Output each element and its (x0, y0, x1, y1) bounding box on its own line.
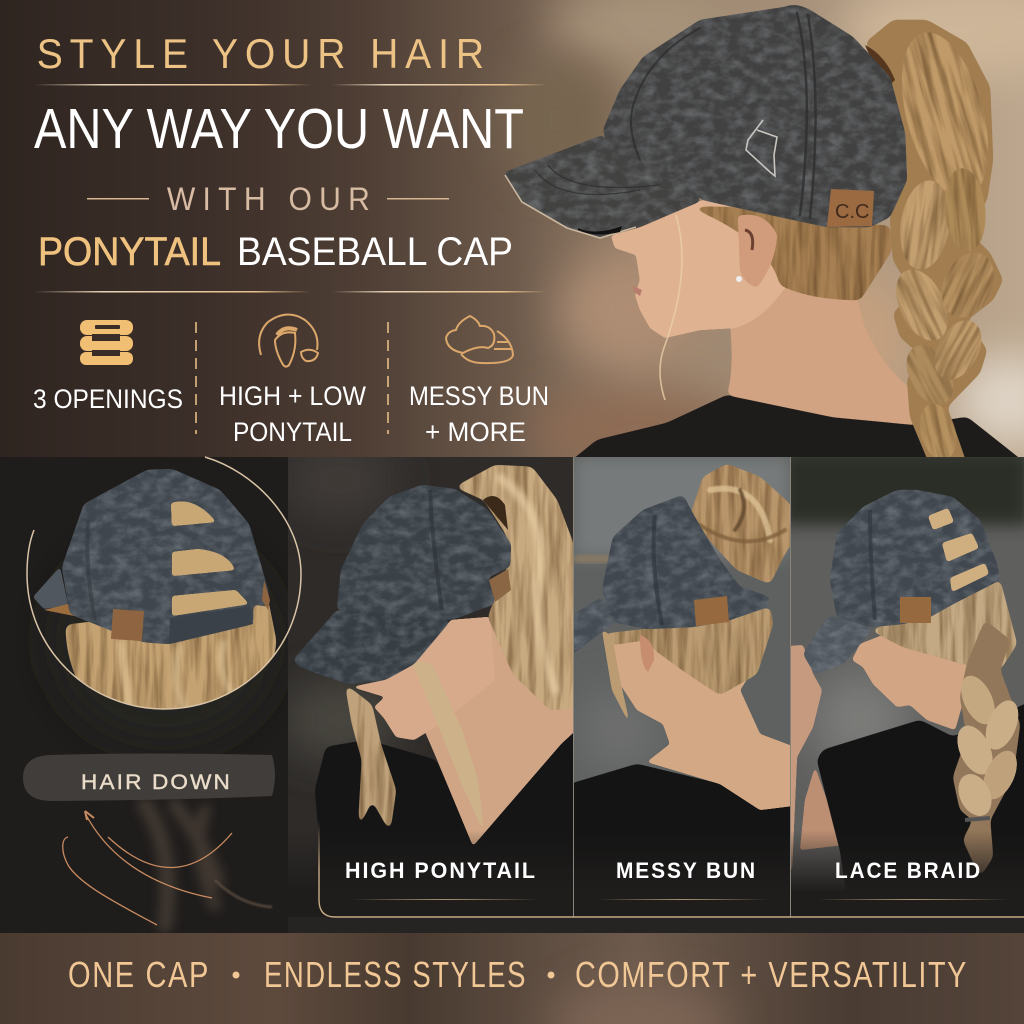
side strand (602, 632, 628, 718)
shirt (576, 395, 1018, 457)
hair below cap (603, 607, 773, 695)
neck (728, 288, 913, 425)
feature label: messy bun + more: + MORE (425, 417, 526, 447)
hair through openings (928, 508, 989, 592)
panel: hair down (23, 468, 276, 933)
leather patch (489, 569, 511, 602)
caption frame (319, 820, 1024, 917)
icon: cap crown (603, 5, 907, 227)
label pill: hair down: HAIR DOWN (81, 771, 232, 794)
cap crown (337, 485, 511, 620)
face (352, 617, 495, 740)
feature label: messy bun + more: MESSY BUN (409, 381, 549, 411)
messy bun (690, 464, 797, 584)
icon: leather patch (827, 189, 874, 227)
title line 2: ANY WAY YOU WANT (34, 97, 524, 161)
footer banner: ENDLESS STYLES (264, 954, 527, 995)
shirt (315, 734, 573, 872)
back hair (690, 207, 892, 300)
footer banner: ONE CAP (68, 954, 210, 995)
hair showing through openings (171, 502, 249, 616)
ear (738, 215, 777, 287)
caption underlines (352, 899, 1007, 900)
cap crown (62, 469, 270, 644)
caption: lace braid: LACE BRAID (835, 858, 982, 883)
feature label: 3 openings: 3 OPENINGS (33, 384, 183, 414)
inset circle: back of cap (33, 469, 276, 725)
loose face strand (660, 215, 682, 400)
strip under frame (288, 917, 1024, 933)
footer banner (0, 933, 1024, 1024)
thin hair tail (215, 880, 272, 907)
cap brim (293, 610, 451, 684)
hand and arm (780, 645, 822, 870)
shading over photo captions (288, 830, 1024, 892)
face (611, 200, 790, 338)
icon: messy bun (446, 316, 513, 363)
panel: messy bun photo (574, 457, 790, 816)
divider (34, 84, 547, 86)
leather patch (900, 597, 931, 623)
cap brim (33, 567, 68, 609)
feature label: high + low ponytail (219, 381, 366, 447)
wispy hair strands (145, 805, 218, 925)
feature label: high + low ponytail: HIGH + LOW (219, 381, 366, 411)
leather patch (111, 609, 144, 641)
photo: woman in cap with braid (503, 5, 1024, 470)
cap crown (602, 495, 770, 629)
shirt (817, 700, 1024, 950)
icon: leather patch: C.C (835, 201, 869, 223)
braid (950, 620, 1024, 877)
inset circle outline (27, 457, 301, 709)
icon: ponytail (259, 314, 318, 367)
hair under cap (870, 580, 1017, 670)
dashed dividers (196, 322, 388, 434)
icon: embroidered heart logo (746, 120, 777, 176)
feature label: high + low ponytail: PONYTAIL (233, 417, 352, 447)
loose hair right (411, 660, 484, 832)
product name (38, 230, 513, 274)
product name: BASEBALL CAP (237, 230, 513, 274)
panel: hero photo banner (0, 0, 1024, 470)
icon: three openings (80, 320, 133, 365)
shirt (574, 764, 790, 886)
product name: PONYTAIL (38, 230, 221, 274)
neck and shoulders (614, 641, 790, 810)
face and neck (852, 627, 975, 730)
panel: high ponytail photo (288, 457, 573, 864)
feature label: messy bun + more (409, 381, 549, 447)
cap brim (803, 617, 873, 674)
divider lines between photos (574, 457, 790, 917)
label pill: hair down (23, 754, 275, 801)
title line 1: STYLE YOUR HAIR (37, 30, 484, 77)
leather patch (694, 596, 729, 626)
arrows: hair movement (63, 811, 232, 925)
caption: high ponytail: HIGH PONYTAIL (345, 858, 537, 883)
caption: messy bun: MESSY BUN (616, 858, 757, 883)
neck and chest (426, 617, 573, 844)
icon: cap brim (503, 135, 703, 238)
ear (640, 635, 654, 672)
cap brim (574, 599, 614, 653)
subtitle with flanking rules: WITH OUR (167, 181, 370, 217)
ponytail braid (865, 20, 1004, 465)
loose hair left (345, 684, 396, 832)
panel: lace braid photo (791, 457, 1024, 885)
divider (34, 291, 547, 292)
cap crown (830, 490, 1000, 627)
ponytail (459, 464, 573, 710)
